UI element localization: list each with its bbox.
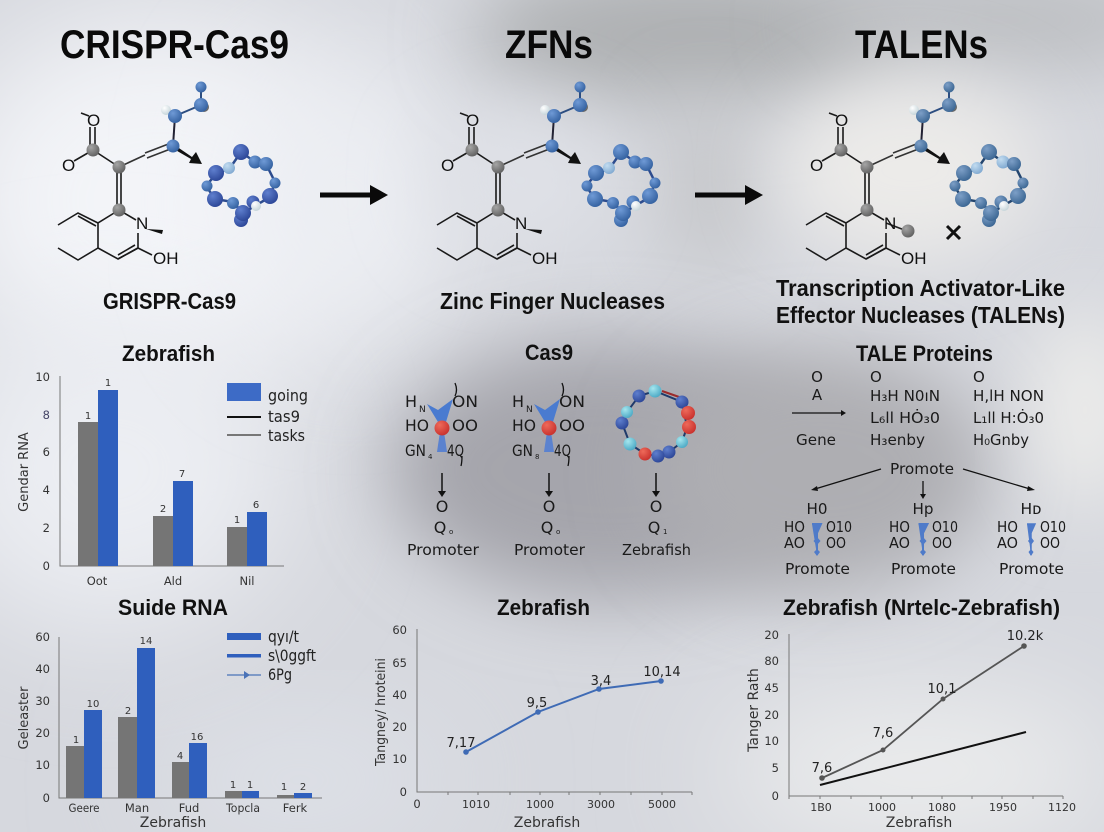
bar chart: Suide RNA: 1 [230,780,236,791]
bar chart: Zebrafish: 1 [234,515,240,526]
promote unit 3: OO [1040,534,1060,552]
line chart: Zebrafish: 65 [392,656,407,670]
bar chart: Suide RNA: 4 [177,751,183,762]
bar chart: Suide RNA: Man [125,801,149,815]
bar chart: Zebrafish: 6 [43,445,50,459]
line chart: Zebrafish (Nrtelc-Zebrafish) [746,595,1076,831]
bar chart: Suide RNA: 2 [300,782,306,793]
promote unit 2: O10 [932,518,958,536]
heading: Cas9: Cas9 [525,340,573,365]
line chart: Zebrafish (Nrtelc-Zebrafish): 10 [764,734,779,748]
chart heading: Zebrafish [497,595,590,620]
legend: 6Pg [268,665,292,684]
bar chart: Suide RNA: 60 [35,630,50,644]
structure: left: GN [405,441,426,460]
line chart: Zebrafish (Nrtelc-Zebrafish): Zebrafish [886,815,952,831]
bar chart: Zebrafish: Nil [240,574,254,588]
line chart: Zebrafish: 5000 [648,798,676,811]
bar chart: Zebrafish: 8 [43,408,50,422]
promote unit 1: AO [784,534,805,552]
legend: tasks [268,426,305,445]
molecule: TALENs: N [884,214,896,233]
bar chart: Suide RNA: 1 [247,780,253,791]
bar chart: Suide RNA: 30 [35,694,50,708]
structure: middle: H [512,392,524,411]
structure: middle: 8 [535,453,539,461]
structure: left: O [436,497,448,516]
diagram: Cas9 structures [405,383,696,559]
line chart: Zebrafish (Nrtelc-Zebrafish): 0 [772,789,779,803]
arrow: ZFNs to TALENs [695,185,763,205]
bar chart: Suide RNA: 20 [35,726,50,740]
bar chart: Zebrafish: Oot [87,574,108,588]
line chart: Zebrafish (Nrtelc-Zebrafish): 7,6 [812,761,832,776]
line chart: Zebrafish: 9,5 [527,696,547,711]
line chart: Zebrafish (Nrtelc-Zebrafish): 1080 [928,801,956,814]
structure: ring: Q [648,518,660,537]
bar chart: Zebrafish: 1 [85,411,91,422]
structure: middle: N [526,405,533,415]
structure: left: OO [452,416,478,435]
bar chart: Zebrafish: 7 [179,469,185,480]
diagram: TALE Proteins [784,368,1066,578]
structure: middle: ON [559,392,585,411]
line chart: Zebrafish (Nrtelc-Zebrafish): 20 [764,628,779,642]
molecule: TALENs: O [810,156,823,175]
bar chart: Suide RNA: 2 [125,706,131,717]
bar chart: Suide RNA: Geere [68,801,100,815]
formula column 3: H₀Gnby [973,431,1029,449]
bar chart: Suide RNA: 10 [87,699,99,710]
promote unit 2: Promote [891,560,956,578]
structure: ring: Zebrafish [622,541,691,559]
structure: middle [512,383,586,559]
subtitle: GRISPR-Cas9: GRISPR-Cas9 [103,288,236,314]
structure: left [405,383,480,559]
line chart: Zebrafish (Nrtelc-Zebrafish): 7,6 [873,726,893,741]
line chart: Zebrafish: 0 [413,797,421,811]
line chart: Zebrafish: 10,14 [643,665,681,680]
molecule: TALENs: OH [901,249,926,268]
formula column 2: L₆ll HȮ₃0 [870,408,940,427]
molecule: CRISPR-Cas9: O [62,156,75,175]
bar chart: Suide RNA: Zebrafish [140,815,206,831]
gene column: A [812,386,823,404]
molecule: ZFNs: N [515,214,527,233]
legend: going [268,386,308,405]
line chart: Zebrafish (Nrtelc-Zebrafish): 10,1 [928,682,956,697]
line chart: Zebrafish: 3,4 [591,674,611,689]
promote unit 3: O10 [1040,518,1066,536]
chart heading: Zebrafish (Nrtelc-Zebrafish) [783,595,1060,620]
molecule: ZFNs: OH [532,249,558,268]
structure: left: HO [405,416,429,435]
column title: TALENs: TALENs [855,23,988,67]
structure: ring: O [650,497,662,516]
molecule: TALENs: O [835,111,848,130]
promote unit 2: Hp [912,500,934,518]
line chart: Zebrafish: 1000 [526,798,554,811]
bar chart: Suide RNA: Fud [179,801,199,815]
promote unit 1: OO [826,534,846,552]
legend [227,627,316,684]
promote unit 3: HO [997,518,1018,536]
bar chart: Suide RNA: 1 [73,735,79,746]
structure: middle: 4Q [554,441,571,460]
structure: middle: Promoter [514,541,586,559]
column title: CRISPR-Cas9: CRISPR-Cas9 [60,23,289,67]
structure: middle: GN [512,441,533,460]
bar chart: Suide RNA: 1 [281,782,287,793]
line chart: Zebrafish: 3000 [587,798,615,811]
bar chart: Zebrafish: 10 [35,370,50,384]
bar chart: Zebrafish: 6 [253,500,259,511]
line chart: Zebrafish (Nrtelc-Zebrafish): 1000 [868,801,896,814]
bar chart: Zebrafish [17,370,308,588]
promote unit 1: O10 [826,518,852,536]
subtitle: TALENs full name: Transcription Activator-Like [776,275,1065,301]
promote unit 2: HO [889,518,910,536]
formula column 2: H₃enby [870,431,925,449]
structure: middle: o [556,528,560,536]
structure: left: Promoter [407,541,480,559]
promote unit 1: Promote [785,560,850,578]
structure: middle: O [543,497,555,516]
line chart: Zebrafish: Tangney/ hroteini [374,658,389,767]
formula column 3: L₁ll H:Ȯ₃0 [973,408,1044,427]
arrow: CRISPR to ZFNs [320,185,388,205]
legend: qyı/t [268,627,299,646]
arrows: branching [811,469,1035,499]
formula column 3 [973,368,1044,449]
promote unit 3: Hᴅ [1020,500,1042,518]
structure: middle: Q [541,518,553,537]
line chart: Zebrafish: 0 [400,785,407,799]
bar chart: Zebrafish: Gendar RNA [17,432,32,512]
structure: left: N [419,405,426,415]
line chart: Zebrafish (Nrtelc-Zebrafish): 1950 [989,801,1017,814]
label: Promote: Promote [890,460,954,478]
line chart: Zebrafish (Nrtelc-Zebrafish): 1B0 [810,801,832,814]
line chart: Zebrafish: 1010 [462,798,490,811]
molecule: ZFNs: O [466,111,479,130]
line chart: Zebrafish: 7,17 [447,736,475,751]
heading: Zebrafish: Zebrafish [122,341,215,366]
promote unit 1: HO [784,518,805,536]
bar chart: Suide RNA: 0 [43,791,50,805]
structure: left: H [405,392,417,411]
subtitle: TALENs full name [776,275,1065,328]
structure: left: Q [434,518,446,537]
bar chart: Suide RNA: 40 [35,662,50,676]
subtitle: TALENs full name: Effector Nucleases (TALENs) [776,302,1065,328]
line chart: Zebrafish (Nrtelc-Zebrafish): 1120 [1048,801,1076,814]
bar chart: Suide RNA: 16 [191,732,203,743]
bar chart: Zebrafish: 2 [160,504,166,515]
line chart: Zebrafish: 60 [392,623,407,637]
bar chart: Suide RNA: 14 [140,636,152,647]
promote unit 1 [784,500,852,578]
structure: ring [616,384,696,559]
chart heading: Suide RNA [118,595,228,620]
legend [227,383,308,445]
molecule: ZFNs: O [441,156,454,175]
molecule: TALENs [806,82,1028,268]
promote unit 2 [889,500,958,578]
line chart: Zebrafish (Nrtelc-Zebrafish): Tanger Rath [746,668,762,753]
heading: TALE Proteins: TALE Proteins [856,341,993,366]
structure: left: 4Q [447,441,464,460]
formula column 2 [870,368,940,449]
bar chart: Zebrafish: 2 [43,521,50,535]
molecule: CRISPR-Cas9: O [87,111,100,130]
bar chart: Zebrafish: 1 [105,378,111,389]
gene column: O [811,368,823,386]
formula column 3: H,lH NON [973,387,1044,405]
bar chart: Suide RNA [17,595,322,831]
bar chart: Suide RNA: Geleaster [17,686,32,749]
structure: left: ON [452,392,478,411]
line chart: Zebrafish (Nrtelc-Zebrafish): 80 [764,654,779,668]
bar chart: Suide RNA: 10 [35,758,50,772]
structure: left: 4 [428,453,433,461]
bar chart: Suide RNA: Ferk [283,801,308,815]
molecule: CRISPR-Cas9 [58,82,280,268]
molecule: ZFNs [437,82,660,268]
promote unit 3: AO [997,534,1018,552]
gene column [792,368,846,449]
line chart: Zebrafish (Nrtelc-Zebrafish): 5 [772,761,779,775]
formula column 2: O [870,368,882,386]
promote unit 2: AO [889,534,910,552]
bar chart: Zebrafish: 0 [43,559,50,573]
structure: middle: OO [559,416,585,435]
gene column: Gene [796,431,836,449]
bar chart: Zebrafish: Ald [164,574,182,588]
promote unit 2: OO [932,534,952,552]
line chart: Zebrafish: Zebrafish [514,815,580,831]
formula column 2: H₃H N0ıN [870,387,940,405]
icon: cross mark [947,226,960,239]
line chart: Zebrafish: 10 [392,752,407,766]
legend: s\0ggft [268,646,316,665]
line chart: Zebrafish (Nrtelc-Zebrafish): 45 [764,681,779,695]
promote unit 1: H0 [806,500,828,518]
line chart: Zebrafish (Nrtelc-Zebrafish): 10.2k [1007,629,1044,644]
line chart: Zebrafish (Nrtelc-Zebrafish): 20 [764,708,779,722]
column title: ZFNs: ZFNs [505,23,593,67]
legend: tas9 [268,407,300,426]
subtitle: Zinc Finger Nucleases: Zinc Finger Nucleases [440,288,665,314]
bar chart: Suide RNA: Topcla [225,801,260,815]
formula column 3: O [973,368,985,386]
promote unit 3 [997,500,1066,578]
bar chart: Zebrafish: 4 [43,483,50,497]
structure: ring: 1 [663,528,667,536]
structure: middle: HO [512,416,536,435]
structure: left: o [449,528,453,536]
molecule: CRISPR-Cas9: N [136,214,148,233]
promote unit 3: Promote [999,560,1064,578]
line chart: Zebrafish [374,595,692,831]
molecule: CRISPR-Cas9: OH [153,249,178,268]
line chart: Zebrafish: 20 [392,720,407,734]
line chart: Zebrafish: 40 [392,688,407,702]
